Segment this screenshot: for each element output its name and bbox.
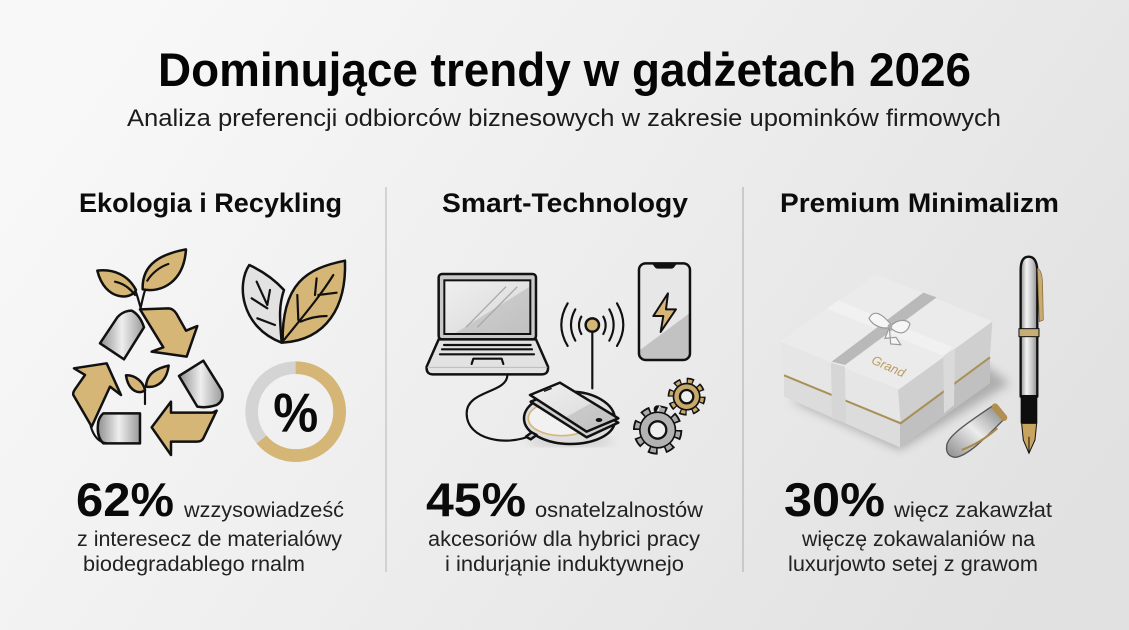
panel: Smart-Technology bbox=[426, 188, 703, 576]
icon: laptop bbox=[427, 274, 548, 374]
stat: 45%: i indurįąnie induktywnejo bbox=[445, 552, 684, 576]
icon: gift box bbox=[780, 274, 1010, 450]
icon: gift box: Grand bbox=[869, 353, 908, 381]
stat: 62%: wzzysowiadześć bbox=[183, 498, 344, 522]
heading: Premium Minimalizm: Premium Minimalizm bbox=[780, 188, 1059, 218]
icon: wireless charger with phone bbox=[467, 375, 618, 446]
subtitle: Analiza preferencji odbiorców biznesowych w zakresie upominków firmowych bbox=[127, 105, 1001, 132]
stat: 30% bbox=[784, 473, 1052, 576]
icon: fountain pen bbox=[1019, 257, 1043, 453]
stat: 45%: 45% bbox=[426, 473, 526, 526]
icon: smartphone with charging bolt bbox=[639, 263, 690, 360]
heading: Ekologia i Recykling: Ekologia i Recykling bbox=[79, 188, 342, 218]
stat: 30%: luxurjowto setej z grawom bbox=[788, 552, 1038, 576]
chart: percent donut: % bbox=[273, 382, 318, 444]
stat: 45% bbox=[426, 473, 703, 576]
icon: wireless signal antenna bbox=[561, 303, 623, 388]
ribbon bbox=[827, 301, 953, 356]
bow bbox=[869, 313, 910, 345]
stat: 45%: osnatelzalnostów bbox=[535, 498, 703, 522]
stat: 30%: więcz zakawzłat bbox=[893, 498, 1052, 522]
stat: 62%: biodegradablego rnalm bbox=[83, 552, 305, 576]
icon: recycling symbol with sprout bbox=[73, 249, 223, 455]
stat: 62%: 62% bbox=[76, 473, 174, 526]
chart: percent donut bbox=[252, 368, 340, 456]
stat: 30%: 30% bbox=[784, 473, 885, 526]
icon: two leaves bbox=[243, 261, 345, 343]
heading: Smart-Technology: Smart-Technology bbox=[442, 188, 688, 218]
icon: gears bbox=[637, 381, 702, 451]
icon: pen cap bbox=[947, 405, 1005, 457]
stat: 30%: więczę zokawalaniów na bbox=[801, 527, 1035, 551]
stat: 45%: akcesoriów dla hybrici pracy bbox=[428, 527, 700, 551]
title: Dominujące trendy w gadżetach 2026 bbox=[158, 43, 971, 96]
stat: 62% bbox=[76, 473, 344, 576]
panel: Premium Minimalizm bbox=[780, 188, 1059, 576]
panel: Ekologia i Recykling bbox=[73, 188, 345, 576]
stat: 62%: z interesecz de materialówy bbox=[77, 527, 342, 551]
